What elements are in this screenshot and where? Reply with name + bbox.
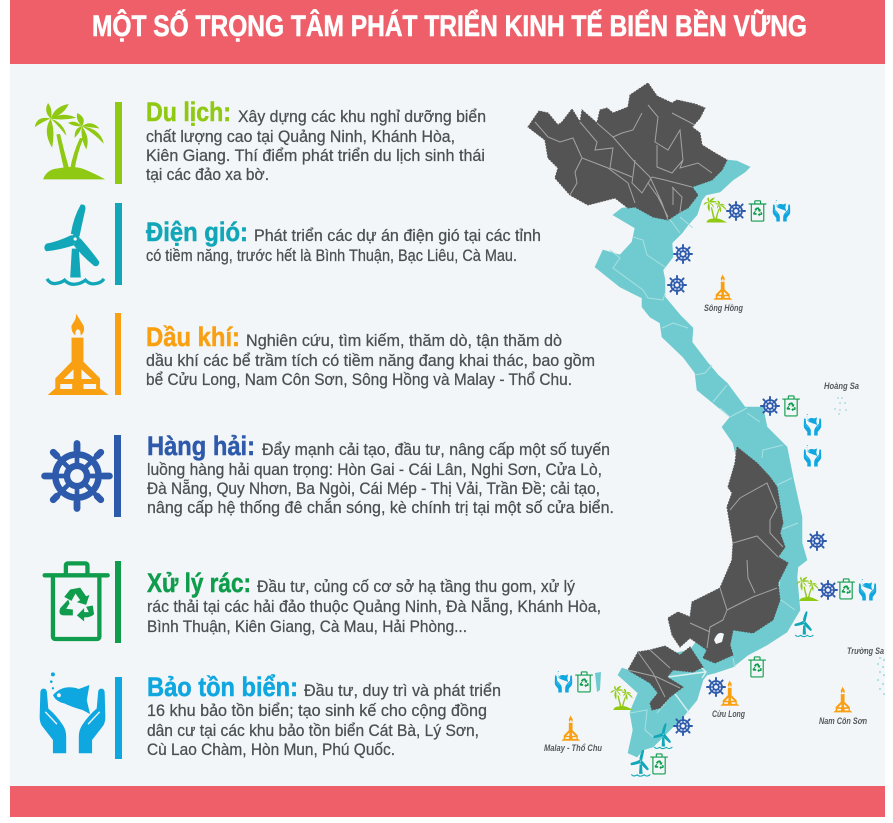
text block: hàng hải: luồng hàng hải quan trọng: Hòn Gai - Cái Lân, Nghi Sơn, Cửa Lò, bbox=[147, 461, 602, 479]
panel: điện gió bbox=[44, 203, 541, 285]
label: Cửu Long: Cửu Long bbox=[712, 709, 745, 719]
map: central highlands and southeast bbox=[668, 447, 788, 663]
text block: hàng hải bbox=[147, 441, 614, 517]
icon: south trash bbox=[749, 657, 765, 677]
label: Nam Côn Sơn: Nam Côn Sơn bbox=[819, 716, 867, 726]
icon: wheel 4 bbox=[807, 531, 827, 551]
icon: Kiên Giang hands bbox=[555, 671, 572, 693]
label: Trường Sa: Trường Sa bbox=[847, 646, 884, 656]
icon: Khánh Hòa palm bbox=[797, 576, 819, 601]
icon: central wheel bbox=[760, 396, 780, 416]
text block: dầu khí bbox=[146, 332, 595, 389]
text block: dầu khí: dầu khí các bể trầm tích có tiềm năng đang khai thác, bao gồm bbox=[146, 352, 595, 370]
text block: hàng hải: Đẩy mạnh cải tạo, đầu tư, nâng cấp một số tuyến bbox=[262, 441, 610, 459]
icon: Bình Thuận turbine bbox=[794, 611, 813, 637]
icon: Cà Mau turbine bbox=[631, 750, 650, 776]
icon: north trash bbox=[749, 201, 766, 221]
map: lake bbox=[714, 633, 724, 644]
divider bar: xử lý rác bbox=[115, 561, 121, 643]
icon: Kiên Giang trash bbox=[576, 672, 592, 692]
text block: xử lý rác: Đầu tư, củng cố cơ sở hạ tầng thu gom, xử lý bbox=[257, 578, 576, 596]
heading: điện gió: Điện gió: bbox=[146, 217, 248, 247]
text block: du lịch: tại các đảo xa bờ. bbox=[146, 166, 269, 184]
divider bar: hàng hải bbox=[114, 435, 121, 517]
icon: hands 2 bbox=[804, 414, 821, 436]
map: Trường Sa islands bbox=[877, 657, 885, 695]
text block: điện gió: có tiềm năng, trước hết là Bình Thuận, Bạc Liêu, Cà Mau. bbox=[146, 247, 517, 265]
heading: hàng hải: Hàng hải: bbox=[147, 431, 255, 461]
text block: dầu khí: Nghiên cứu, tìm kiếm, thăm dò, tận thăm dò bbox=[246, 332, 562, 350]
panel: dầu khí bbox=[48, 313, 595, 395]
icon: Sóc Trăng wheel bbox=[673, 716, 693, 736]
map: delta rivers bbox=[667, 666, 706, 714]
icon: oil Nam Côn Sơn bbox=[833, 687, 853, 712]
icon: oil Cửu Long bbox=[720, 680, 739, 706]
text block: điện gió bbox=[146, 227, 541, 265]
map: Mekong delta provinces bbox=[628, 646, 703, 710]
text block: du lịch: Kiên Giang. Thí điểm phát triển du lịch sinh thái bbox=[146, 147, 485, 165]
icon: north hands bbox=[773, 200, 790, 222]
icon: Khánh Hòa hands bbox=[859, 579, 876, 601]
map: northern provinces bbox=[528, 83, 727, 220]
icon: hands 3 bbox=[804, 445, 821, 467]
text block: du lịch bbox=[146, 108, 486, 184]
map: coastal provinces bbox=[595, 160, 807, 757]
icon: Khánh Hòa trash bbox=[838, 579, 854, 599]
heading: bảo tồn biển: Bảo tồn biển: bbox=[147, 672, 298, 702]
icon: recycle bin bbox=[45, 563, 108, 639]
text block: bảo tồn biển: 16 khu bảo tồn biển; tạo sinh kế cho cộng đồng bbox=[147, 702, 487, 720]
map: Phú Quốc island bbox=[595, 672, 601, 692]
icon: Kiên Giang palm bbox=[611, 685, 633, 710]
icon: hands holding fish bbox=[40, 672, 105, 753]
divider bar: du lịch bbox=[115, 102, 122, 184]
map: coastal province borders bbox=[610, 217, 798, 737]
text block: du lịch: chất lượng cao tại Quảng Ninh, Khánh Hòa, bbox=[146, 128, 455, 146]
divider bar: dầu khí bbox=[115, 313, 121, 395]
text block: hàng hải: Đà Nẵng, Quy Nhơn, Ba Ngòi, Cái Mép - Thị Vải, Trần Đề; cải tạo, bbox=[147, 479, 600, 498]
icon: south wheel bbox=[706, 677, 726, 697]
icon: Bạc Liêu turbine bbox=[653, 723, 672, 749]
panel: xử lý rác bbox=[45, 561, 601, 643]
divider bar: điện gió bbox=[115, 203, 122, 285]
icon: Cà Mau trash bbox=[651, 754, 667, 774]
map: Hoàng Sa islands bbox=[834, 397, 847, 415]
heading: xử lý rác: Xử lý rác: bbox=[147, 568, 251, 598]
panel: hàng hải bbox=[42, 431, 614, 517]
icon: wheel 2 bbox=[673, 244, 693, 264]
text block: xử lý rác: rác thải tại các hải đảo thuộc Quảng Ninh, Đà Nẵng, Khánh Hòa, bbox=[147, 597, 601, 616]
text block: bảo tồn biển: Đầu tư, duy trì và phát triển bbox=[304, 682, 501, 700]
text block: bảo tồn biển: dân cư tại các khu bảo tồn biển Cát Bà, Lý Sơn, bbox=[147, 722, 479, 740]
icon: palm island bbox=[35, 103, 105, 179]
text block: bảo tồn biển bbox=[147, 682, 501, 759]
heading: dầu khí: Dầu khí: bbox=[146, 322, 240, 352]
footer band bbox=[10, 786, 885, 817]
map of Vietnam bbox=[528, 83, 885, 757]
icon: central trash bbox=[783, 396, 799, 416]
icon: oil Malay - Thổ Chu bbox=[561, 715, 580, 741]
text block: xử lý rác: Bình Thuận, Kiên Giang, Cà Mau, Hải Phòng... bbox=[147, 618, 467, 636]
header band bbox=[10, 0, 885, 64]
panel: du lịch bbox=[35, 97, 486, 184]
icon: north wheel bbox=[726, 201, 746, 221]
text block: điện gió: Phát triển các dự án điện gió tại các tỉnh bbox=[254, 227, 541, 245]
heading: du lịch: Du lịch: bbox=[146, 97, 231, 127]
divider bar: bảo tồn biển bbox=[115, 677, 122, 759]
text block: hàng hải: nâng cấp hệ thống đê chắn sóng, kè chính trị tại một số cửa biển. bbox=[147, 498, 614, 517]
icon: wheel 3 bbox=[667, 275, 687, 295]
text block: dầu khí: bể Cửu Long, Nam Côn Sơn, Sông Hồng và Malay - Thổ Chu. bbox=[146, 371, 572, 389]
icon: oil rig bbox=[48, 314, 109, 395]
label: Malay - Thổ Chu: Malay - Thổ Chu bbox=[544, 743, 602, 753]
text block: xử lý rác bbox=[147, 578, 601, 636]
icon: ship wheel bbox=[42, 441, 112, 511]
icon: oil Sông Hồng bbox=[713, 274, 732, 300]
label: Sông Hồng: Sông Hồng bbox=[704, 303, 743, 313]
icon: wind turbine bbox=[44, 204, 104, 284]
text block: du lịch: Xây dựng các khu nghỉ dưỡng biển bbox=[238, 108, 486, 126]
text block: bảo tồn biển: Cù Lao Chàm, Hòn Mun, Phú Quốc. bbox=[147, 741, 395, 759]
icon: north palm bbox=[704, 197, 727, 222]
icon: Khánh Hòa wheel bbox=[818, 580, 838, 600]
label: Hoàng Sa: Hoàng Sa bbox=[824, 381, 859, 391]
map: inland province borders bbox=[535, 105, 783, 697]
panel: bảo tồn biển bbox=[40, 672, 501, 759]
